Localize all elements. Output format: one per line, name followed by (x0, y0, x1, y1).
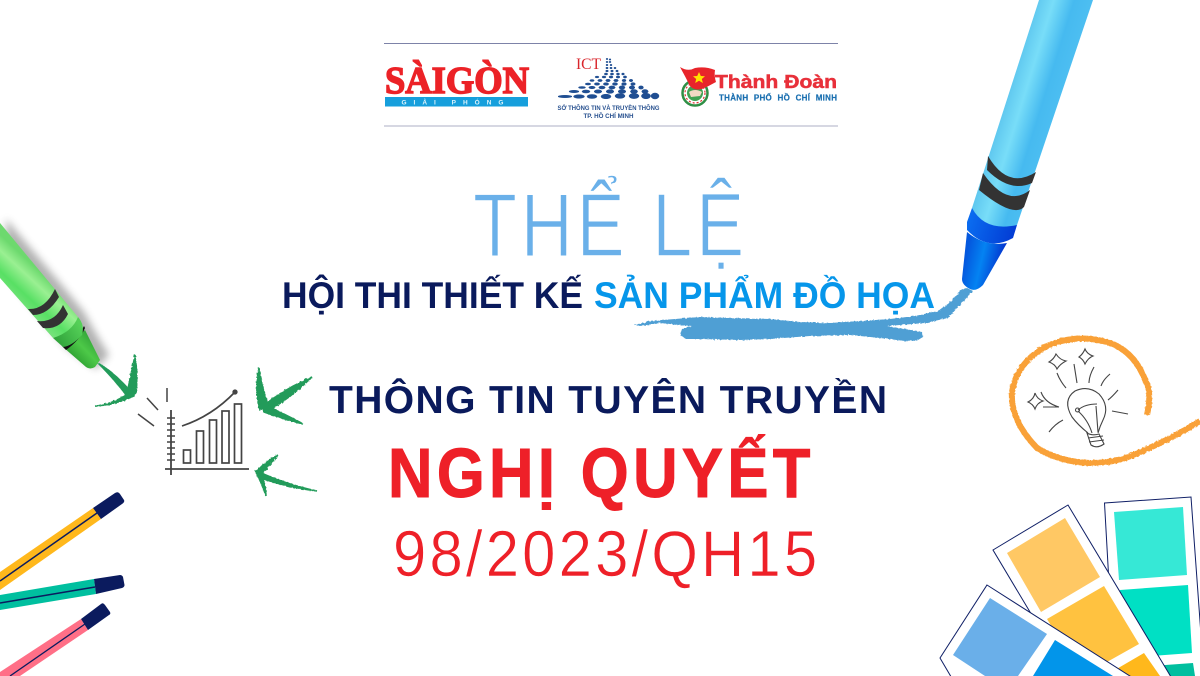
icon: green arrows (95, 355, 317, 496)
logo: Sài Gòn Giải Phóng: GIẢI PHÓNG (401, 98, 511, 106)
pencil: yellow (0, 492, 124, 590)
icon: orange swirl (1012, 339, 1200, 463)
swatch card: teal (1104, 497, 1200, 676)
swatch card: orange (993, 505, 1180, 676)
logo: ICT: TP. HỒ CHÍ MINH (584, 110, 634, 120)
logo band (384, 44, 838, 126)
icon: rising bar chart (138, 388, 249, 475)
icon: colour swatch fan (940, 497, 1200, 676)
title: THỂ LỆ: THỂ LỆ (473, 175, 744, 276)
heading: Nghị quyết: NGHỊ QUYẾT (388, 433, 810, 512)
icon: green crayon (0, 219, 109, 369)
logo: Sài Gòn Giải Phóng: SÀIGÒN (385, 60, 529, 102)
logo: ICT (558, 56, 660, 120)
pencil: teal (0, 575, 124, 610)
logo: Thành Đoàn (680, 67, 837, 106)
pencil: pink (0, 603, 110, 676)
scribble: blue crayon stroke under heading (634, 288, 973, 341)
icon: coloured pencils (0, 492, 124, 676)
logo: ICT: SỞ THÔNG TIN VÀ TRUYỀN THÔNG (558, 102, 660, 112)
logo: Thành Đoàn: THÀNH PHỐ HỒ CHÍ MINH (719, 92, 837, 102)
heading: Hội thi thiết kế sản phẩm đồ họa: SẢN PHẨM ĐỒ HỌA (594, 274, 935, 316)
icon: light bulb (1028, 349, 1128, 447)
logo: Thành Đoàn: Thành Đoàn (715, 71, 837, 92)
icon: blue crayon (962, 0, 1093, 290)
heading: Thông tin tuyên truyền: THÔNG TIN TUYÊN TRUYỀN (329, 377, 887, 422)
logo: ICT: ICT (576, 56, 601, 73)
text: 98/2023/QH15: 98/2023/QH15 (393, 518, 817, 591)
swatch card: blue (940, 585, 1155, 676)
heading: Hội thi thiết kế sản phẩm đồ họa: HỘI THI THIẾT KẾ (282, 274, 583, 316)
